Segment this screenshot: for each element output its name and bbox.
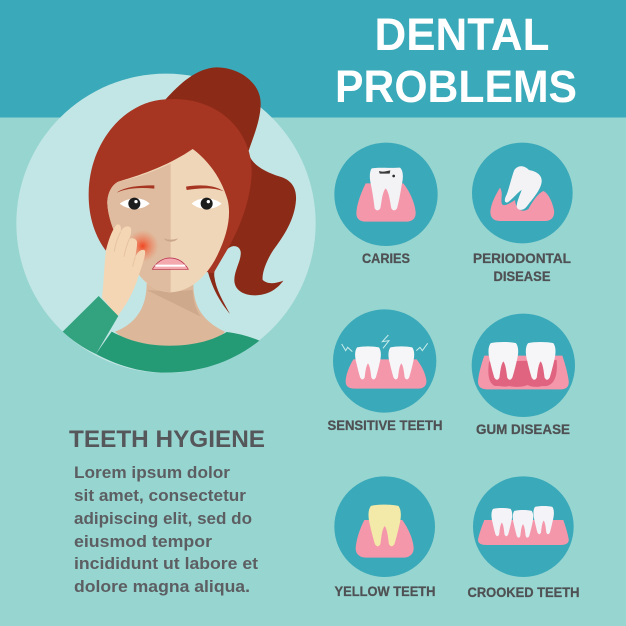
header band [0,0,626,118]
title [335,9,577,112]
pain glow [127,230,159,262]
nose [164,238,178,242]
body text: incididunt ut labore et [74,555,259,573]
gum [490,188,554,221]
subheading: teeth hygiene: TEETH HYGIENE [69,426,265,453]
left eye [120,198,150,210]
label: sensitive teeth: SENSITIVE TEETH [328,418,442,433]
right eye [192,198,222,210]
label: periodontal disease: DISEASE [494,269,551,284]
hair back [89,99,252,273]
icon: yellow teeth [334,476,435,577]
left eyebrow [117,185,154,193]
tooth right [533,506,554,534]
label: gum disease: GUM DISEASE [476,422,570,437]
sweater [96,332,259,373]
sensitivity zaps [342,335,428,352]
gum [356,183,416,222]
icon: gum disease [472,314,575,417]
hand [102,224,145,317]
title: PROBLEMS [335,61,577,112]
tooth middle [513,510,533,538]
right eyebrow [186,185,224,191]
inflamed gum [488,360,557,387]
face [107,149,229,292]
gum [356,520,414,558]
body text: adipiscing elit, sed do [74,510,252,528]
face shadow half [107,163,171,292]
right tooth [388,346,414,379]
label: periodontal disease [473,251,571,284]
label: periodontal disease: PERIODONTAL [473,251,571,266]
label: yellow teeth: YELLOW TEETH [334,584,436,599]
icon: crooked teeth [473,476,574,577]
body text: dolore magna aliqua. [74,578,250,596]
icon: caries [334,143,438,246]
label: crooked teeth: CROOKED TEETH [468,585,580,600]
ponytail [165,67,296,314]
portrait: woman with toothache [16,67,316,373]
decay marks [379,170,390,174]
icon: periodontal disease [472,143,573,243]
gum [478,356,569,389]
mouth [152,258,188,269]
decayed tooth [370,168,403,210]
title: DENTAL [374,9,550,60]
neck shadow [147,290,201,317]
gum [478,520,569,545]
yellow tooth [368,505,401,546]
body text [74,464,259,596]
icon: sensitive teeth [333,309,436,413]
portrait background circle [16,74,316,373]
body text: eiusmod tempor [74,533,213,551]
body text: sit amet, consectetur [74,487,247,505]
right tooth [526,342,556,380]
finger creases [114,232,135,267]
left tooth [355,346,381,379]
gum [346,359,426,389]
body text: Lorem ipsum dolor [74,464,231,482]
tooth left [491,508,512,536]
label: caries: CARIES [362,251,410,266]
left tooth [488,342,518,380]
loose tooth [505,166,542,210]
neck [115,283,225,347]
sleeve [63,296,118,354]
